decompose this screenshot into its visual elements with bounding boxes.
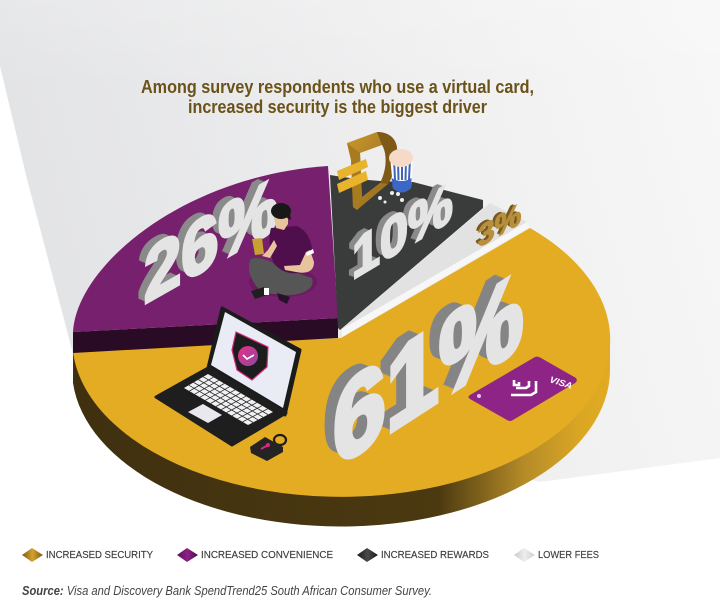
legend (22, 548, 599, 562)
slice: increased rewards 10% (330, 175, 483, 330)
pie side wall (73, 340, 610, 526)
legend item: increased rewards (357, 548, 489, 562)
legend item: increased convenience: INCREASED CONVENIENCE (201, 549, 333, 561)
title (141, 76, 534, 117)
slice: lower fees 3% (342, 203, 527, 337)
icon: person with phone (249, 203, 317, 304)
value: 61%: 61% (333, 245, 524, 493)
slice: increased convenience 26% (73, 166, 338, 353)
title: increased security is the biggest driver (188, 96, 487, 117)
legend item: increased rewards: INCREASED REWARDS (381, 549, 489, 561)
legend item: increased security (22, 548, 153, 562)
value: 10%: 10% (352, 168, 453, 292)
icon: laptop with shield (156, 308, 300, 445)
title: Among survey respondents who use a virtual card, (141, 76, 534, 97)
slice: increased security 61% (73, 228, 610, 497)
icon: discovery miles symbol (337, 132, 397, 210)
legend item: increased convenience (177, 548, 333, 562)
legend item: lower fees: LOWER FEES (538, 549, 599, 561)
pie chart (73, 166, 610, 526)
icon: padlock (250, 435, 286, 461)
legend item: increased security: INCREASED SECURITY (46, 549, 153, 561)
legend item: lower fees (514, 548, 599, 562)
icon: popcorn (378, 149, 413, 204)
grey background panel (0, 0, 720, 482)
icon: bank card (468, 357, 577, 421)
value: 26%: 26% (144, 160, 278, 321)
value: 3%: 3% (478, 197, 521, 255)
source note: Source: Visa and Discovery Bank SpendTrend25 South African Consumer Survey. (22, 584, 432, 598)
icon: bank card: VISA (548, 375, 574, 392)
